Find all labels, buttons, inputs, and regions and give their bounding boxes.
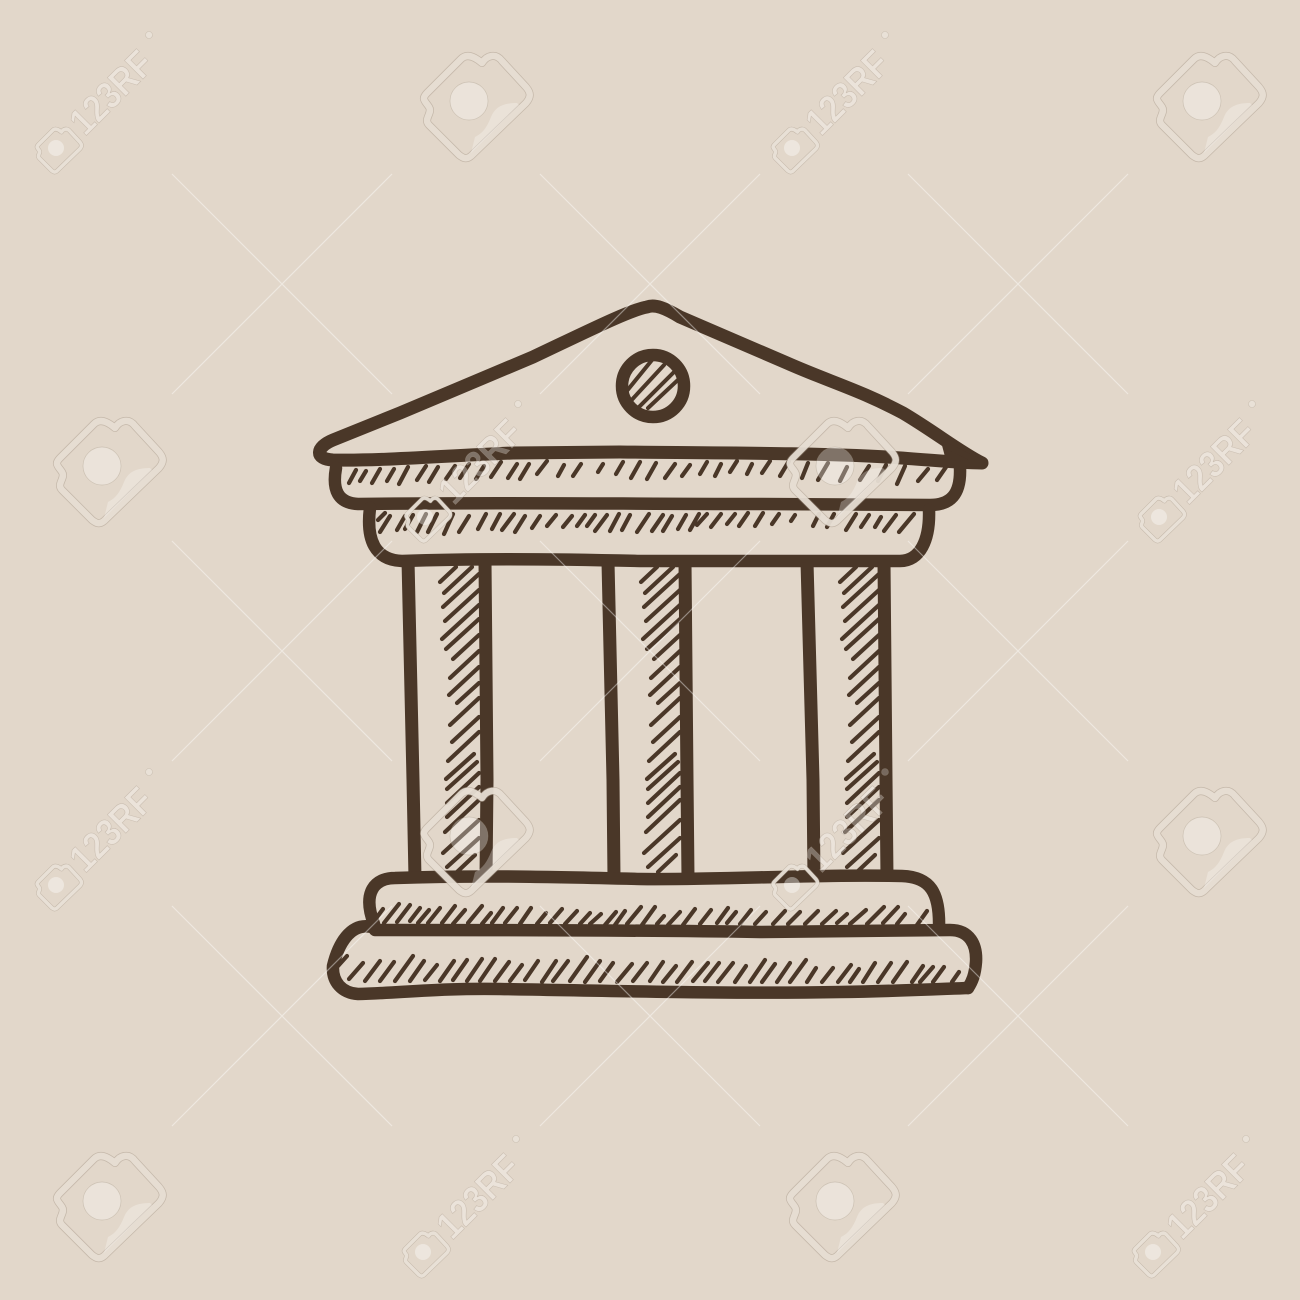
- watermark 123RF text: 123RF: [62, 43, 162, 143]
- watermark 123RF text: 123RF: [429, 1147, 529, 1247]
- watermark 123RF text: 123RF: [431, 412, 531, 512]
- watermark 123RF text: 123RF: [1159, 1147, 1259, 1247]
- columns: [408, 560, 887, 878]
- step hatching: [338, 904, 959, 982]
- building: [319, 306, 982, 994]
- watermark 123RF text: 123RF: [62, 780, 162, 880]
- watermark 123RF text: 123RF: [798, 43, 898, 143]
- roof pediment: [319, 306, 982, 464]
- watermark 123RF text: 123RF: [798, 780, 898, 880]
- watermark lattice lines: [172, 174, 1128, 1126]
- column hatching: [440, 567, 879, 872]
- entablature hatching: [349, 461, 946, 534]
- steps: [333, 876, 976, 994]
- round window: [622, 355, 684, 417]
- watermark 123RF text: 123RF: [1165, 412, 1265, 512]
- entablature bands: [335, 468, 960, 561]
